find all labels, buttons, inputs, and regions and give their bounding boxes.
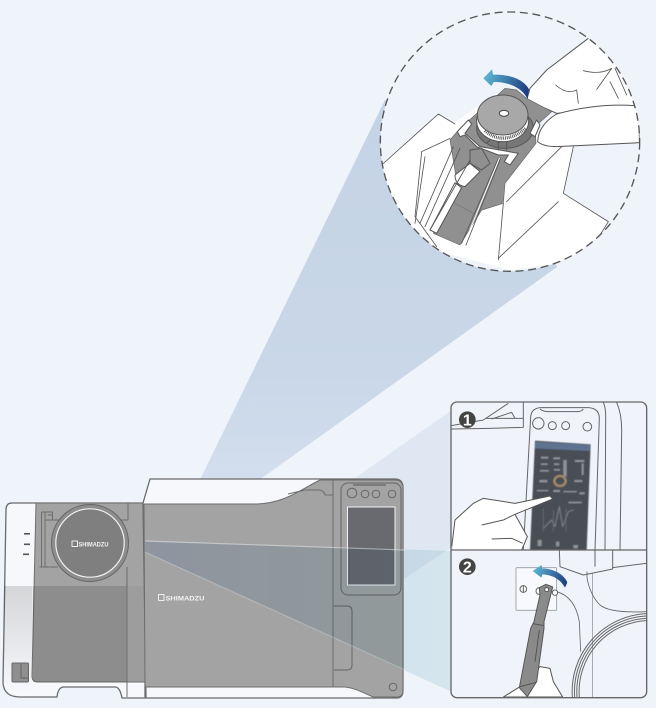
white housing [382, 88, 608, 270]
indicator dashes [23, 533, 30, 555]
screw [389, 683, 397, 691]
projection beam: instrument to panel 2 [145, 541, 452, 692]
main unit gray body [144, 480, 403, 697]
round door [52, 504, 128, 582]
left panel seam lines [40, 503, 145, 697]
wire from fitting [557, 592, 581, 652]
coil [572, 614, 646, 697]
left unit lower shading [4, 586, 32, 692]
buttons [533, 418, 544, 429]
logo: door: SHIMADZU [78, 542, 108, 548]
side handle [334, 606, 352, 670]
instrument outline [603, 402, 622, 550]
inset panels [451, 402, 647, 698]
vertical line [592, 574, 593, 697]
circle background [380, 12, 640, 271]
panel background [451, 402, 647, 698]
step badge 2: 2 [463, 559, 472, 576]
panel 2 arrow [533, 565, 567, 588]
panel outline [451, 402, 647, 698]
lower left port [12, 663, 28, 682]
phone body [523, 408, 599, 550]
step badge 1: 1 [463, 412, 472, 429]
lower finger [538, 105, 639, 147]
dashed circle outline [380, 12, 640, 271]
knob [477, 95, 533, 148]
upper housing block [559, 550, 646, 575]
mounting plate [516, 568, 557, 610]
tube fitting and wire [587, 572, 646, 612]
tube connector [470, 148, 490, 170]
hand [503, 667, 563, 697]
blue rotation arrow [483, 69, 529, 99]
projection beam: screen to panel 1 [345, 410, 452, 585]
machine lines [451, 402, 523, 429]
projection beam: instrument to magnified circle [195, 100, 557, 490]
left unit white housing [3, 503, 145, 698]
wrench [519, 584, 553, 697]
wires [415, 147, 501, 245]
magnified artwork [382, 38, 639, 270]
main unit white top [143, 479, 403, 698]
top recess [288, 480, 333, 687]
screen [530, 441, 591, 550]
left unit gray panel [32, 503, 145, 682]
hand with stylus [451, 496, 553, 550]
control panel [341, 483, 401, 595]
step badge 1 [459, 411, 476, 429]
step badge 2 [459, 558, 476, 576]
panel 2: wrench [503, 550, 646, 697]
instrument illustration [3, 479, 403, 698]
logo: main body: SHIMADZU [166, 596, 205, 602]
clamp bracket [457, 120, 540, 165]
finger lines [556, 68, 627, 103]
panel divider [451, 548, 647, 552]
dark recess [433, 88, 552, 245]
upper white panel [527, 38, 637, 113]
magnified circle detail [380, 12, 640, 271]
panel 1: touch screen [451, 402, 622, 550]
logo box: main body [158, 594, 164, 600]
